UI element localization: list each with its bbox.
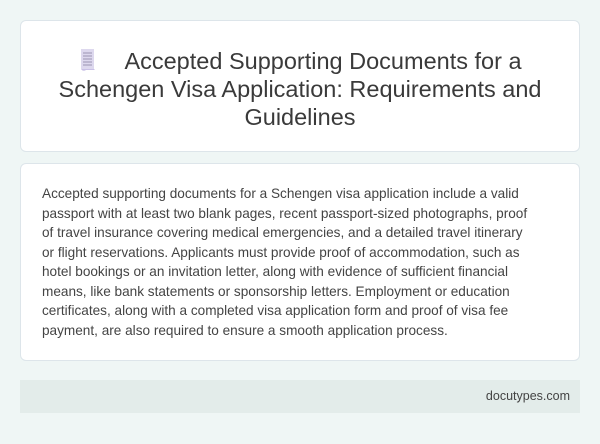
text block: Accepted supporting documents for a Schengen visa application include a valid bbox=[42, 186, 519, 201]
footer: docutypes.com bbox=[486, 389, 570, 403]
text block bbox=[42, 186, 528, 338]
text block: means, like bank statements or sponsorship letters. Employment or education bbox=[42, 284, 510, 298]
text block: or flight reservations. Applicants must provide proof of accommodation, such as bbox=[42, 244, 520, 260]
text block: hotel bookings or an invitation letter, along with evidence of sufficient financial bbox=[42, 264, 508, 279]
panel: header bbox=[20, 20, 580, 152]
text block: of travel insurance covering medical emergencies, and a detailed travel itinerary bbox=[42, 225, 523, 240]
text block: certificates, along with a completed visa application form and proof of visa fee bbox=[42, 303, 508, 318]
icon: document bbox=[81, 49, 95, 71]
title: Accepted Supporting Documents for a Schengen Visa Application: Requirements and Guidelines bbox=[59, 48, 541, 130]
text block: passport with at least two blank pages, recent passport-sized photographs, proof bbox=[42, 206, 527, 220]
panel: description bbox=[20, 163, 580, 361]
footer bbox=[20, 380, 580, 413]
text block: payment, are also required to ensure a smooth application process. bbox=[42, 322, 448, 338]
